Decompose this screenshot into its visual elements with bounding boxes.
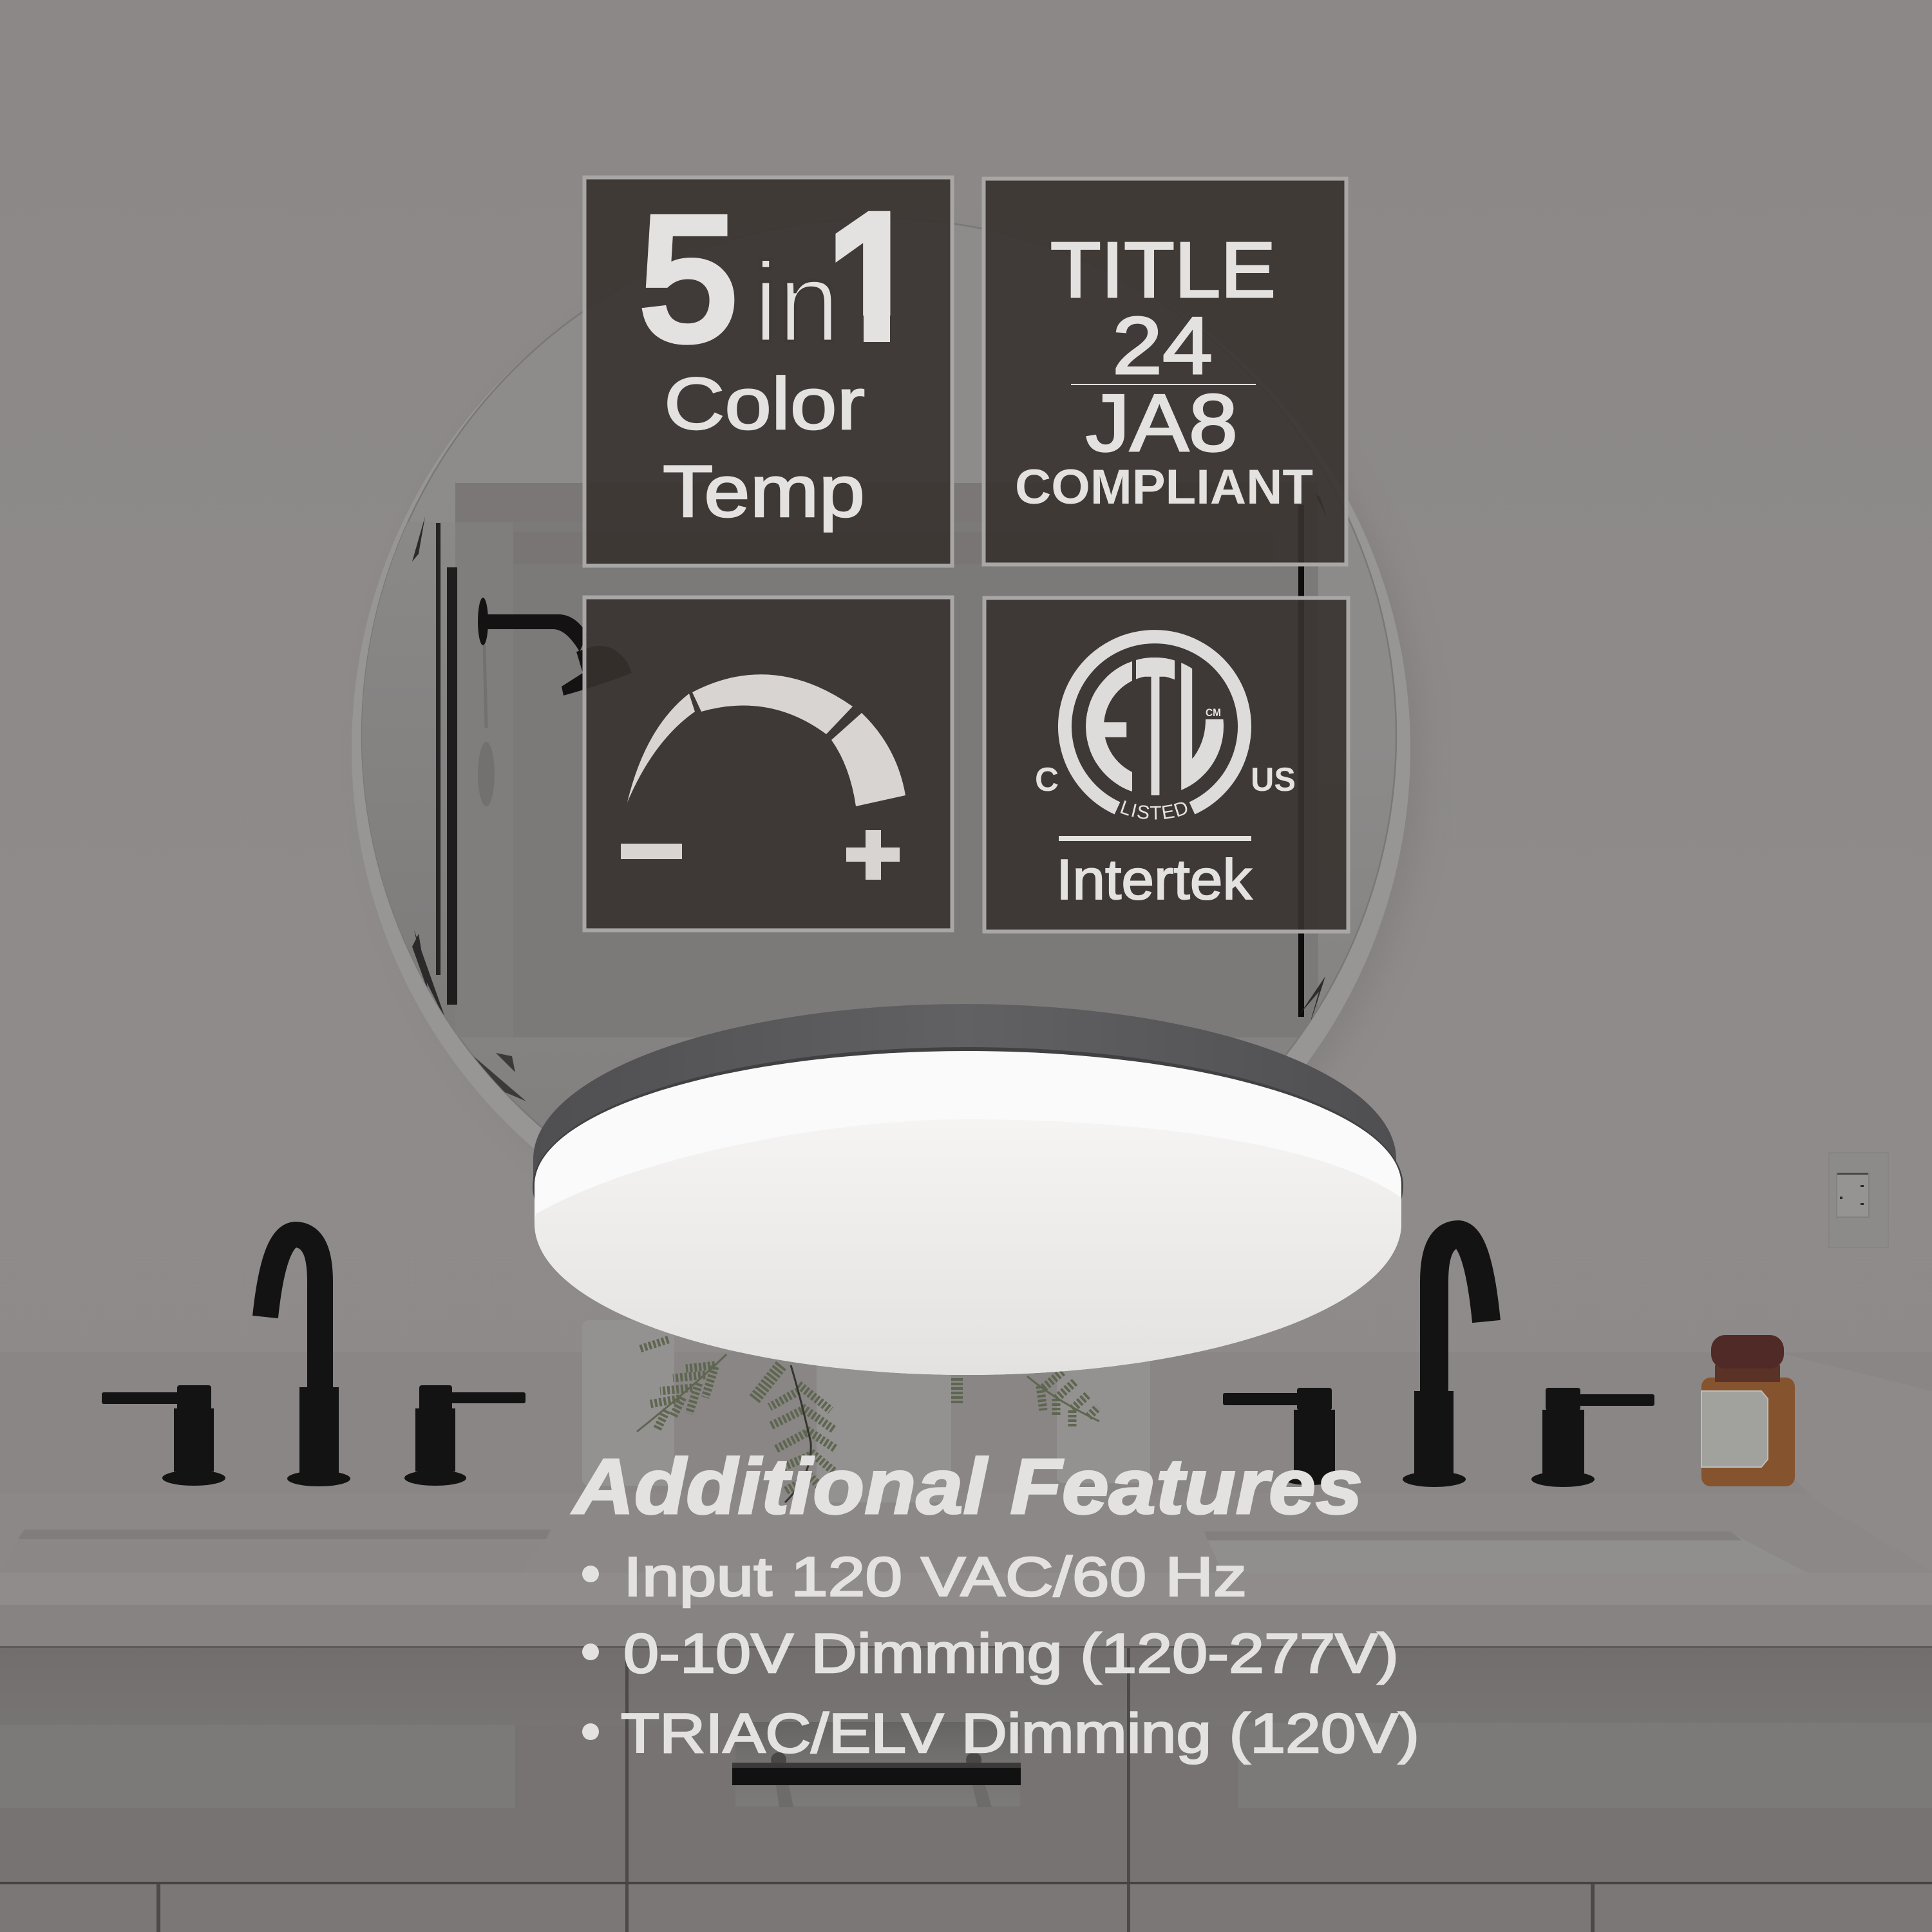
- panel: 5 in 1 color temp: [585, 178, 952, 565]
- ETL mark: T: [1136, 614, 1175, 838]
- JA8: JA8: [1086, 377, 1238, 468]
- LISTED: LISTED: [1121, 800, 1188, 819]
- US: US: [1251, 761, 1296, 799]
- icon: ETL ring: [1065, 637, 1244, 808]
- left faucet: [102, 1235, 526, 1486]
- backsplash and countertop: [0, 1352, 1932, 1647]
- fern sprigs: [637, 1340, 1099, 1502]
- icon: shower head in mirror: [478, 598, 632, 696]
- additional features heading: Additional Features: [571, 1443, 1363, 1530]
- C: C: [1035, 761, 1059, 799]
- Intertek: Intertek: [1056, 848, 1253, 911]
- divider: [1059, 836, 1251, 841]
- icon: plus: [846, 830, 900, 880]
- big numeral 1: 1: [824, 179, 923, 377]
- panel: Title 24 JA8 compliant: [984, 179, 1346, 564]
- panel: ETL Intertek listing: L: [1176, 614, 1221, 838]
- features list: TRIAC/ELV Dimming (120V): [621, 1703, 1419, 1765]
- fraction line: [1071, 384, 1256, 385]
- product: ceiling light: [533, 1004, 1403, 1375]
- panel: ETL Intertek listing: [983, 596, 1350, 934]
- icon: minus: [621, 844, 682, 859]
- wall outlet: [1829, 1153, 1888, 1247]
- TITLE: TITLE: [1050, 226, 1276, 314]
- COMPLIANT: COMPLIANT: [1015, 460, 1313, 515]
- right faucet: [1223, 1235, 1654, 1487]
- label Temp: Temp: [663, 451, 865, 533]
- features list: [582, 1546, 1419, 1765]
- word in: in: [753, 240, 840, 366]
- label Color: Color: [664, 363, 865, 445]
- panel: dimming gauge: [585, 598, 952, 930]
- ETL mark: E: [1083, 619, 1133, 843]
- icon: dimmer arc: [627, 674, 905, 806]
- drawer handle: [732, 1752, 1021, 1807]
- big numeral 5: 5: [640, 182, 737, 376]
- round mirror: [352, 223, 1411, 1149]
- cabinet drawers: [0, 1646, 1932, 1932]
- big numeral 1: [835, 211, 890, 342]
- features list: Input 120 VAC/60 Hz: [623, 1546, 1247, 1608]
- amber jar: [1701, 1335, 1795, 1486]
- ETL mark: [1086, 658, 1224, 795]
- features list: 0-10V Dimming (120-277V): [623, 1623, 1399, 1685]
- CM mark: CM: [1206, 706, 1221, 719]
- 24: 24: [1112, 300, 1213, 391]
- decorative vases: [582, 1320, 1150, 1502]
